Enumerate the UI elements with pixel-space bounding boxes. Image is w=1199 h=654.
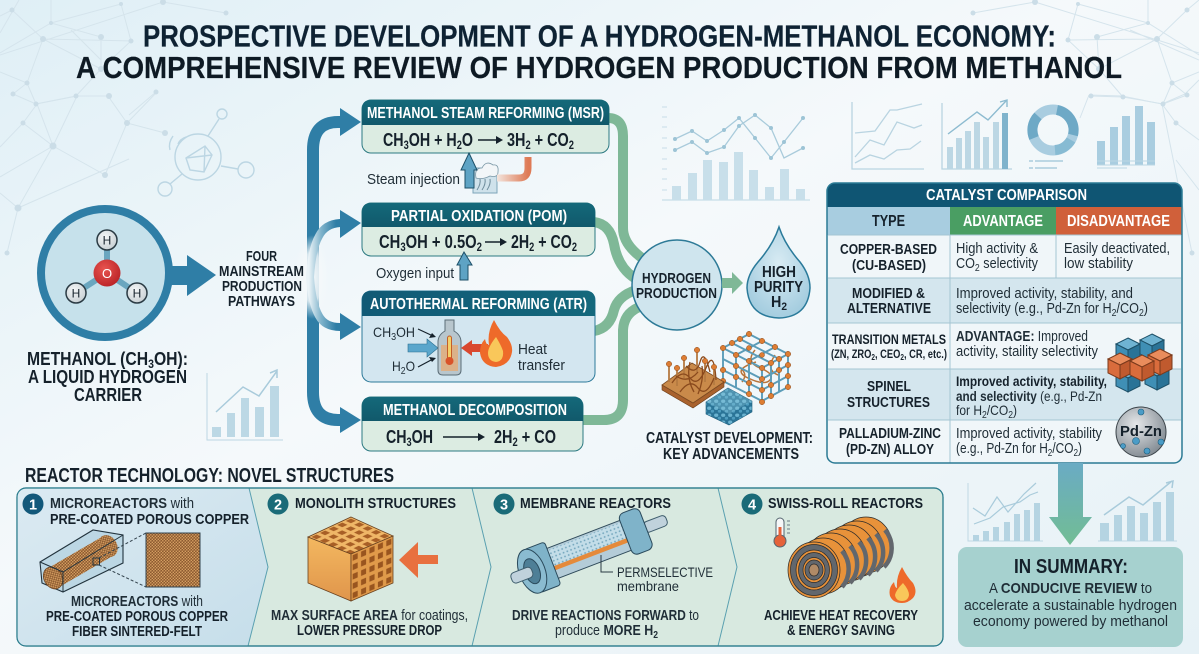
row: palladium-zinc alloy: Improved activity, stability bbox=[956, 426, 1103, 442]
row: copper-based: (CU-BASED) bbox=[852, 258, 926, 274]
step 4: swiss-roll reactors bbox=[742, 494, 923, 639]
panel: methanol steam reforming: 3H bbox=[507, 129, 531, 150]
chart: donut bbox=[1029, 110, 1074, 168]
high purity H2 drop bbox=[747, 227, 810, 318]
panel: methanol steam reforming: 2 bbox=[525, 138, 531, 152]
panel: autothermal reforming bbox=[362, 291, 595, 382]
row: modified and alternative: ALTERNATIVE bbox=[847, 301, 931, 317]
methanol label: CARRIER bbox=[74, 385, 142, 405]
panel: partial oxidation: CH bbox=[379, 231, 406, 252]
row: spinel structures: Improved activity, stability, bbox=[956, 373, 1107, 389]
row: copper-based: CO bbox=[956, 256, 978, 272]
label: four mainstream production pathways: FOUR bbox=[246, 248, 277, 265]
panel: partial oxidation: 2 bbox=[572, 240, 577, 254]
panel: methanol steam reforming: METHANOL STEAM REFORMING (MSR) bbox=[367, 105, 604, 122]
chart: small bar chart lower left bbox=[207, 370, 283, 440]
arrow: flow into monolith bbox=[399, 542, 438, 578]
methanol label: A LIQUID HYDROGEN bbox=[28, 367, 187, 387]
methanol label: OH): bbox=[154, 349, 188, 369]
label: catalyst development: CATALYST DEVELOPMENT: bbox=[646, 430, 813, 447]
step 2: monolith structures: MAX SURFACE AREA for coatings, bbox=[271, 608, 468, 624]
step 3: membrane reactors: membrane bbox=[617, 578, 679, 594]
row: modified and alternative: /CO bbox=[1117, 301, 1139, 317]
icon: oxygen input bbox=[376, 252, 472, 282]
arrow: to high purity hydrogen bbox=[722, 272, 743, 294]
step 2: monolith structures bbox=[268, 494, 468, 639]
icon: methanol molecule atoms: O bbox=[102, 266, 112, 281]
icon: metal oxide cubes bbox=[1108, 334, 1172, 392]
step 1: microreactors bbox=[22, 494, 249, 640]
panel: methanol steam reforming: OH + H bbox=[409, 129, 457, 150]
panel: summary: economy powered by methanol bbox=[973, 613, 1168, 630]
panel: summary: accelerate a sustainable hydrogen bbox=[964, 597, 1177, 614]
panel: methanol steam reforming: O bbox=[462, 129, 473, 150]
icon: catalyst structures bbox=[662, 331, 791, 425]
panel: methanol decomposition: OH bbox=[412, 426, 433, 447]
icon: flame small bbox=[890, 567, 916, 603]
panel: partial oxidation: 2H bbox=[511, 231, 535, 252]
panel: partial oxidation: 2 bbox=[529, 240, 535, 254]
label: catalyst development: KEY ADVANCEMENTS bbox=[663, 446, 799, 463]
panel: methanol decomposition: 2 bbox=[513, 435, 518, 449]
arrow: methanol to pathways bbox=[170, 255, 216, 296]
step 1: microreactors: PRE-COATED POROUS COPPER bbox=[50, 511, 249, 528]
label: catalyst development bbox=[646, 430, 813, 463]
high purity H2 drop: PURITY bbox=[754, 279, 804, 296]
column headers: DISADVANTAGE bbox=[1067, 213, 1170, 230]
panel: methanol decomposition: CH bbox=[386, 426, 413, 447]
column headers: ADVANTAGE bbox=[963, 213, 1043, 230]
icon: steam injection bbox=[367, 153, 528, 193]
step 3: membrane reactors: 2 bbox=[653, 630, 658, 641]
icon: porous foam block bbox=[706, 388, 752, 425]
icon: thermometer bbox=[774, 518, 790, 547]
icon: porous copper reactor bbox=[39, 530, 200, 592]
chart: column bars bbox=[1097, 106, 1155, 168]
row: transition metals: TRANSITION METALS bbox=[832, 332, 946, 347]
step 3: membrane reactors: MEMBRANE REACTORS bbox=[520, 495, 671, 512]
step 1: microreactors: 1 bbox=[29, 498, 37, 514]
step 1: microreactors: FIBER SINTERED-FELT bbox=[72, 624, 202, 640]
icon: lattice framework bbox=[720, 331, 791, 405]
icon: flame bbox=[480, 320, 512, 367]
step 3: membrane reactors: produce MORE H bbox=[555, 623, 661, 639]
row: transition metals: (ZN, ZRO bbox=[831, 349, 881, 361]
step 2: monolith structures: 2 bbox=[274, 498, 282, 514]
chart: bars and lines background bbox=[662, 107, 810, 200]
row: spinel structures: SPINEL bbox=[867, 379, 911, 395]
step 1: microreactors: PRE-COATED POROUS COPPER bbox=[46, 609, 228, 625]
row: copper-based: selectivity bbox=[980, 256, 1039, 272]
methanol label: METHANOL (CH bbox=[27, 349, 166, 369]
panel: autothermal reforming: transfer bbox=[518, 358, 565, 374]
chart: line chart bbox=[852, 102, 924, 169]
icon: methanol molecule atoms: H bbox=[72, 286, 80, 300]
row: spinel structures: and selectivity (e.g., Pd-Zn bbox=[956, 388, 1102, 404]
icon: decorative molecule with cube bbox=[158, 109, 254, 196]
row: modified and alternative: ) bbox=[1144, 301, 1148, 317]
row: palladium-zinc alloy: 2 bbox=[1073, 448, 1078, 459]
panel: autothermal reforming: H bbox=[392, 358, 402, 374]
panel: partial oxidation: OH + 0.5O bbox=[406, 231, 477, 252]
row: modified and alternative: Improved activity, stability, and bbox=[956, 286, 1133, 302]
panel: methanol decomposition: METHANOL DECOMPOSITION bbox=[383, 402, 567, 419]
panel: summary bbox=[958, 547, 1183, 647]
methanol label bbox=[27, 349, 188, 405]
panel: autothermal reforming: O bbox=[406, 358, 415, 374]
row: transition metals: , CR, etc.) bbox=[904, 349, 947, 361]
panel: methanol decomposition bbox=[362, 397, 583, 451]
row: transition metals: , CEO bbox=[875, 349, 900, 361]
high purity H2 drop: 2 bbox=[781, 301, 787, 313]
row: copper-based: 2 bbox=[975, 263, 980, 274]
row: transition metals bbox=[831, 329, 1099, 362]
row: spinel structures: 2 bbox=[1008, 410, 1013, 421]
step 1: microreactors: MICROREACTORS with bbox=[50, 495, 194, 512]
icon: membrane tube bbox=[503, 498, 675, 601]
column headers bbox=[872, 213, 1170, 230]
row: transition metals: activity, staility selectivity bbox=[956, 344, 1099, 360]
step 1: microreactors: MICROREACTORS with bbox=[71, 594, 203, 610]
row: modified and alternative: selectivity (e.g., Pd-Zn for H bbox=[956, 301, 1135, 317]
row: copper-based bbox=[840, 241, 1170, 274]
row: transition metals: 2 bbox=[871, 353, 875, 362]
panel: autothermal reforming: OH bbox=[396, 324, 415, 340]
icon: steam injection: Steam injection bbox=[367, 171, 460, 188]
panel: summary: IN SUMMARY: bbox=[1014, 556, 1128, 578]
panel: partial oxidation: 2 bbox=[477, 240, 482, 254]
step 3: membrane reactors: 3 bbox=[500, 498, 508, 514]
panel: autothermal reforming: Heat bbox=[518, 342, 547, 358]
step 4: swiss-roll reactors: & ENERGY SAVING bbox=[787, 623, 895, 639]
panel: methanol decomposition: + CO bbox=[518, 426, 556, 447]
icon: methanol molecule atoms: H bbox=[133, 286, 141, 300]
panel: methanol decomposition: 3 bbox=[407, 435, 412, 449]
table: catalyst comparison bbox=[827, 183, 1182, 463]
icon: oxygen input: Oxygen input bbox=[376, 265, 455, 282]
step 3: membrane reactors bbox=[494, 494, 713, 641]
panel: partial oxidation: + CO bbox=[534, 231, 572, 252]
step 2: monolith structures: MONOLITH STRUCTURES bbox=[295, 495, 456, 512]
chart: mini chart left of summary arrow bbox=[968, 483, 1043, 541]
panel: autothermal reforming: 3 bbox=[391, 332, 397, 343]
row: transition metals: ADVANTAGE: Improved bbox=[956, 329, 1088, 345]
row: modified and alternative bbox=[847, 286, 1148, 319]
step 4: swiss-roll reactors: SWISS-ROLL REACTORS bbox=[768, 495, 923, 512]
methanol label: 3 bbox=[148, 357, 154, 371]
row: transition metals: 2 bbox=[900, 353, 904, 362]
hydrogen production circle bbox=[632, 240, 722, 330]
icon: copper catalyst plate bbox=[662, 347, 724, 408]
row: spinel structures: for H bbox=[956, 402, 986, 418]
row: palladium-zinc alloy bbox=[839, 426, 1103, 459]
icon: reactor vessel bbox=[438, 320, 461, 375]
charts: top right decorative charts bbox=[852, 100, 1155, 169]
icon: Pd-Zn sphere bbox=[1116, 407, 1166, 457]
panel: methanol steam reforming: + CO bbox=[531, 129, 569, 150]
high purity H2 drop: HIGH bbox=[762, 264, 796, 281]
panel: partial oxidation bbox=[362, 203, 595, 256]
chart: mini chart right of summary arrow bbox=[1098, 481, 1177, 541]
hydrogen production circle: HYDROGEN bbox=[642, 270, 711, 287]
panel: summary: A CONDUCIVE REVIEW to bbox=[989, 580, 1152, 597]
row: copper-based: High activity & bbox=[956, 241, 1038, 257]
row: palladium-zinc alloy: /CO bbox=[1052, 441, 1073, 457]
step 2: monolith structures: LOWER PRESSURE DROP bbox=[297, 623, 442, 639]
row: palladium-zinc alloy: PALLADIUM-ZINC bbox=[839, 426, 941, 442]
chart: rising bars bbox=[942, 100, 1012, 169]
hydrogen production circle: PRODUCTION bbox=[636, 285, 717, 302]
icon: methanol molecule atoms bbox=[66, 230, 147, 303]
step 3: membrane reactors: PERMSELECTIVE bbox=[617, 564, 713, 580]
table heading: CATALYST COMPARISON bbox=[926, 187, 1087, 204]
row: spinel structures: /CO bbox=[987, 402, 1008, 418]
column headers: TYPE bbox=[872, 213, 905, 230]
panel: autothermal reforming: AUTOTHERMAL REFORMING (ATR) bbox=[370, 296, 587, 313]
label: four mainstream production pathways: PATHWAYS bbox=[228, 293, 295, 310]
row: palladium-zinc alloy: 2 bbox=[1048, 448, 1053, 459]
panel: methanol steam reforming bbox=[362, 100, 609, 153]
arrow: table down to summary bbox=[1049, 463, 1092, 545]
step 4: swiss-roll reactors: 4 bbox=[748, 498, 756, 514]
icon: monolith cube bbox=[308, 517, 393, 601]
row: spinel structures: STRUCTURES bbox=[847, 395, 930, 411]
panel: methanol decomposition: 2H bbox=[494, 426, 518, 447]
panel: methanol steam reforming: 3 bbox=[404, 138, 409, 152]
icon: Pd-Zn sphere: Pd-Zn bbox=[1120, 423, 1162, 440]
step 4: swiss-roll reactors: ACHIEVE HEAT RECOVERY bbox=[764, 608, 918, 624]
label: four mainstream production pathways: PRODUCTION bbox=[222, 278, 302, 295]
label: four mainstream production pathways: MAINSTREAM bbox=[219, 263, 304, 280]
heading: reactor technology: REACTOR TECHNOLOGY: NOVEL STRUCTURES bbox=[25, 464, 394, 487]
icon: methanol molecule atoms: H bbox=[103, 234, 111, 248]
high purity H2 drop: H bbox=[771, 294, 782, 311]
row: modified and alternative: 2 bbox=[1139, 308, 1144, 319]
panel: partial oxidation: PARTIAL OXIDATION (POM) bbox=[391, 208, 567, 225]
row: copper-based: COPPER-BASED bbox=[840, 242, 937, 258]
row: modified and alternative: MODIFIED & bbox=[852, 286, 925, 302]
row: palladium-zinc alloy: ) bbox=[1078, 441, 1082, 457]
label: four mainstream production pathways bbox=[219, 248, 304, 310]
row: palladium-zinc alloy: (PD-ZN) ALLOY bbox=[846, 442, 934, 458]
step 3: membrane reactors: DRIVE REACTIONS FORWARD to bbox=[512, 608, 699, 624]
flows: green pathways to hydrogen production bbox=[582, 118, 642, 420]
title bbox=[76, 18, 1122, 85]
row: modified and alternative: 2 bbox=[1112, 308, 1117, 319]
icon: swiss roll bbox=[788, 517, 892, 598]
row: spinel structures: 2 bbox=[982, 410, 987, 421]
panel: methanol steam reforming: 2 bbox=[569, 138, 574, 152]
row: palladium-zinc alloy: (e.g., Pd-Zn for H bbox=[956, 441, 1068, 457]
panel: autothermal reforming: CH bbox=[373, 324, 393, 340]
panel: methanol steam reforming: 2 bbox=[457, 138, 462, 152]
panel: methanol steam reforming: CH bbox=[383, 129, 410, 150]
arrows: branching blue pathways bbox=[295, 108, 361, 433]
panel: partial oxidation: 3 bbox=[400, 240, 406, 254]
methanol molecule circle bbox=[41, 209, 169, 337]
row: spinel structures bbox=[847, 373, 1107, 421]
row: copper-based: low stability bbox=[1064, 256, 1134, 272]
row: copper-based: Easily deactivated, bbox=[1064, 241, 1170, 257]
panel: autothermal reforming: 2 bbox=[401, 366, 406, 377]
panel: reactor technology strip bbox=[17, 488, 943, 646]
row: spinel structures: ) bbox=[1013, 402, 1017, 418]
